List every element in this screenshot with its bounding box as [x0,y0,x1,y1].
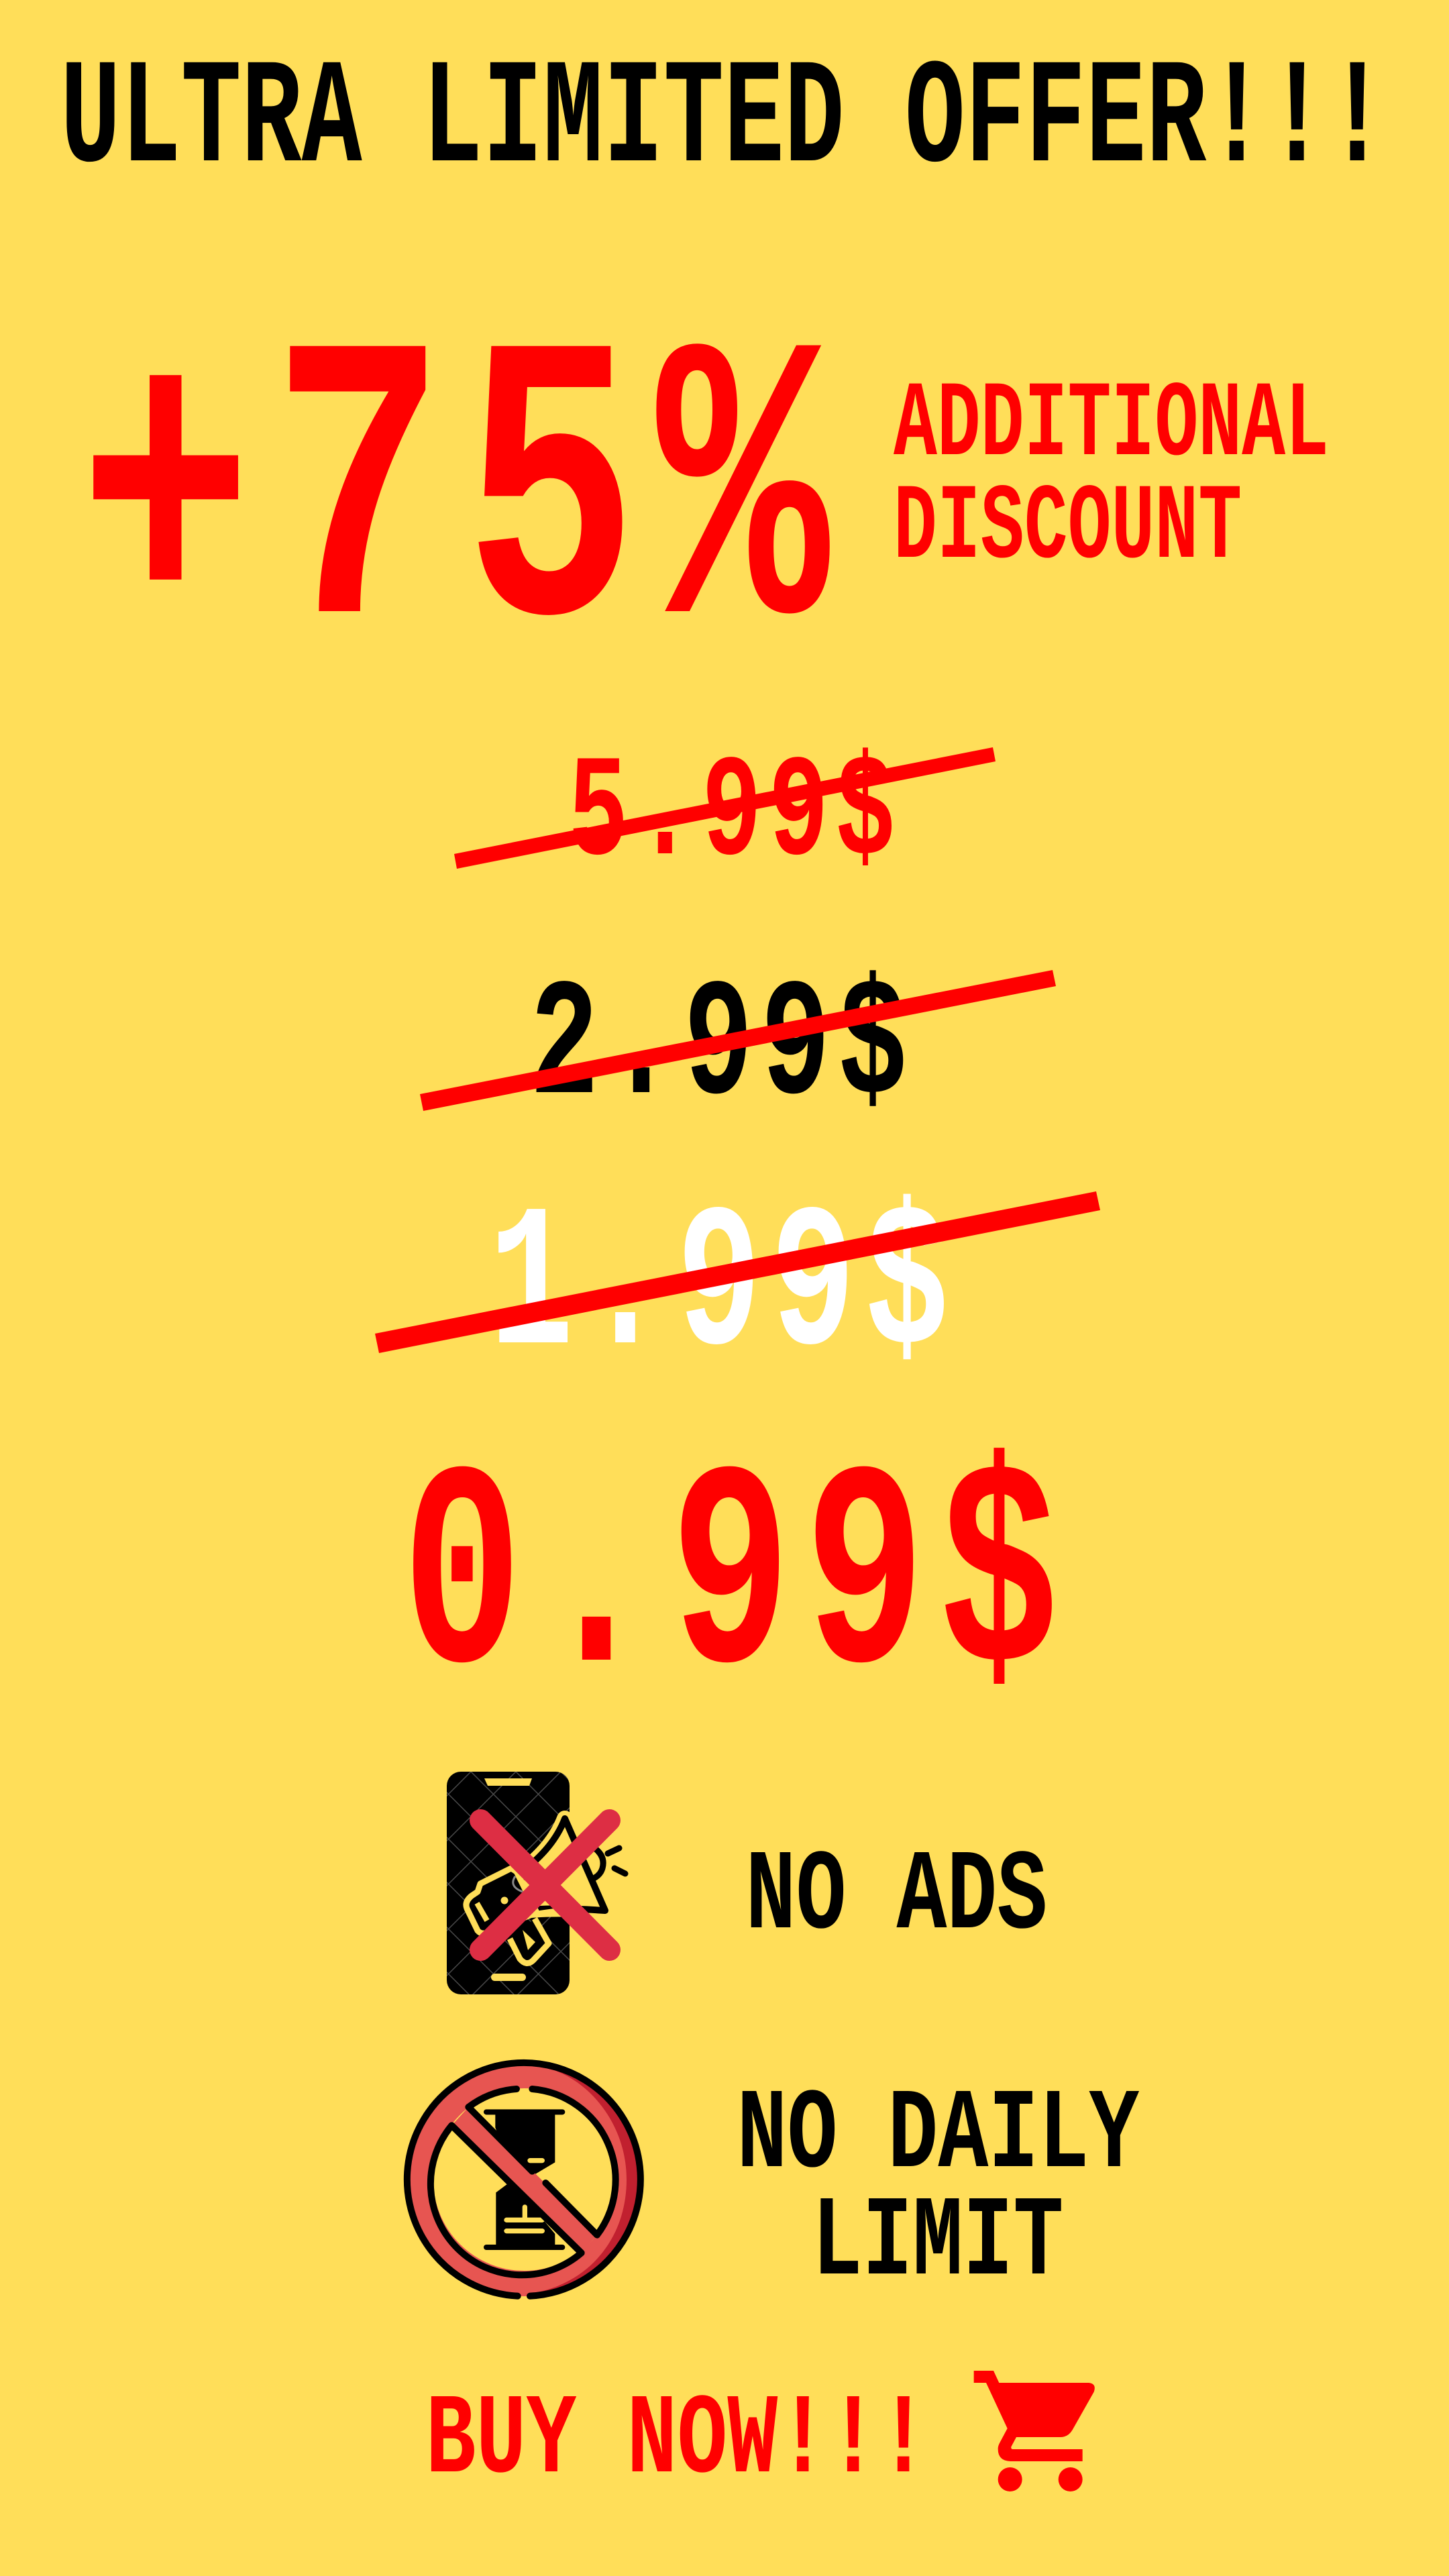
discount percentage: +75% [79,276,833,732]
icon: phone with crossed megaphone [447,1772,625,1994]
struck price 5.99$ [454,733,996,897]
struck price 1.99$: 1.99$ [489,1175,949,1404]
label: no daily limit: LIMIT [812,2179,1063,2308]
discount label: ADDITIONAL [894,366,1329,487]
icon: shopping cart [974,2371,1095,2491]
struck price 1.99$ [375,1175,1100,1404]
discount label [894,366,1329,590]
discount label: DISCOUNT [894,468,1242,590]
icon: hourglass prohibited [407,2063,641,2296]
struck price 2.99$ [420,955,1056,1142]
struck price 2.99$: 2.99$ [529,955,908,1142]
final price 0.99$: 0.99$ [402,1419,1059,1747]
call to action: BUY NOW!!! [425,2377,928,2506]
label: no daily limit [737,2072,1140,2308]
label: no daily limit: NO DAILY [737,2072,1140,2200]
struck price 5.99$: 5.99$ [568,733,896,897]
label: no ads: NO ADS [746,1833,1047,1962]
title: ULTRA LIMITED OFFER!!! [60,36,1387,205]
